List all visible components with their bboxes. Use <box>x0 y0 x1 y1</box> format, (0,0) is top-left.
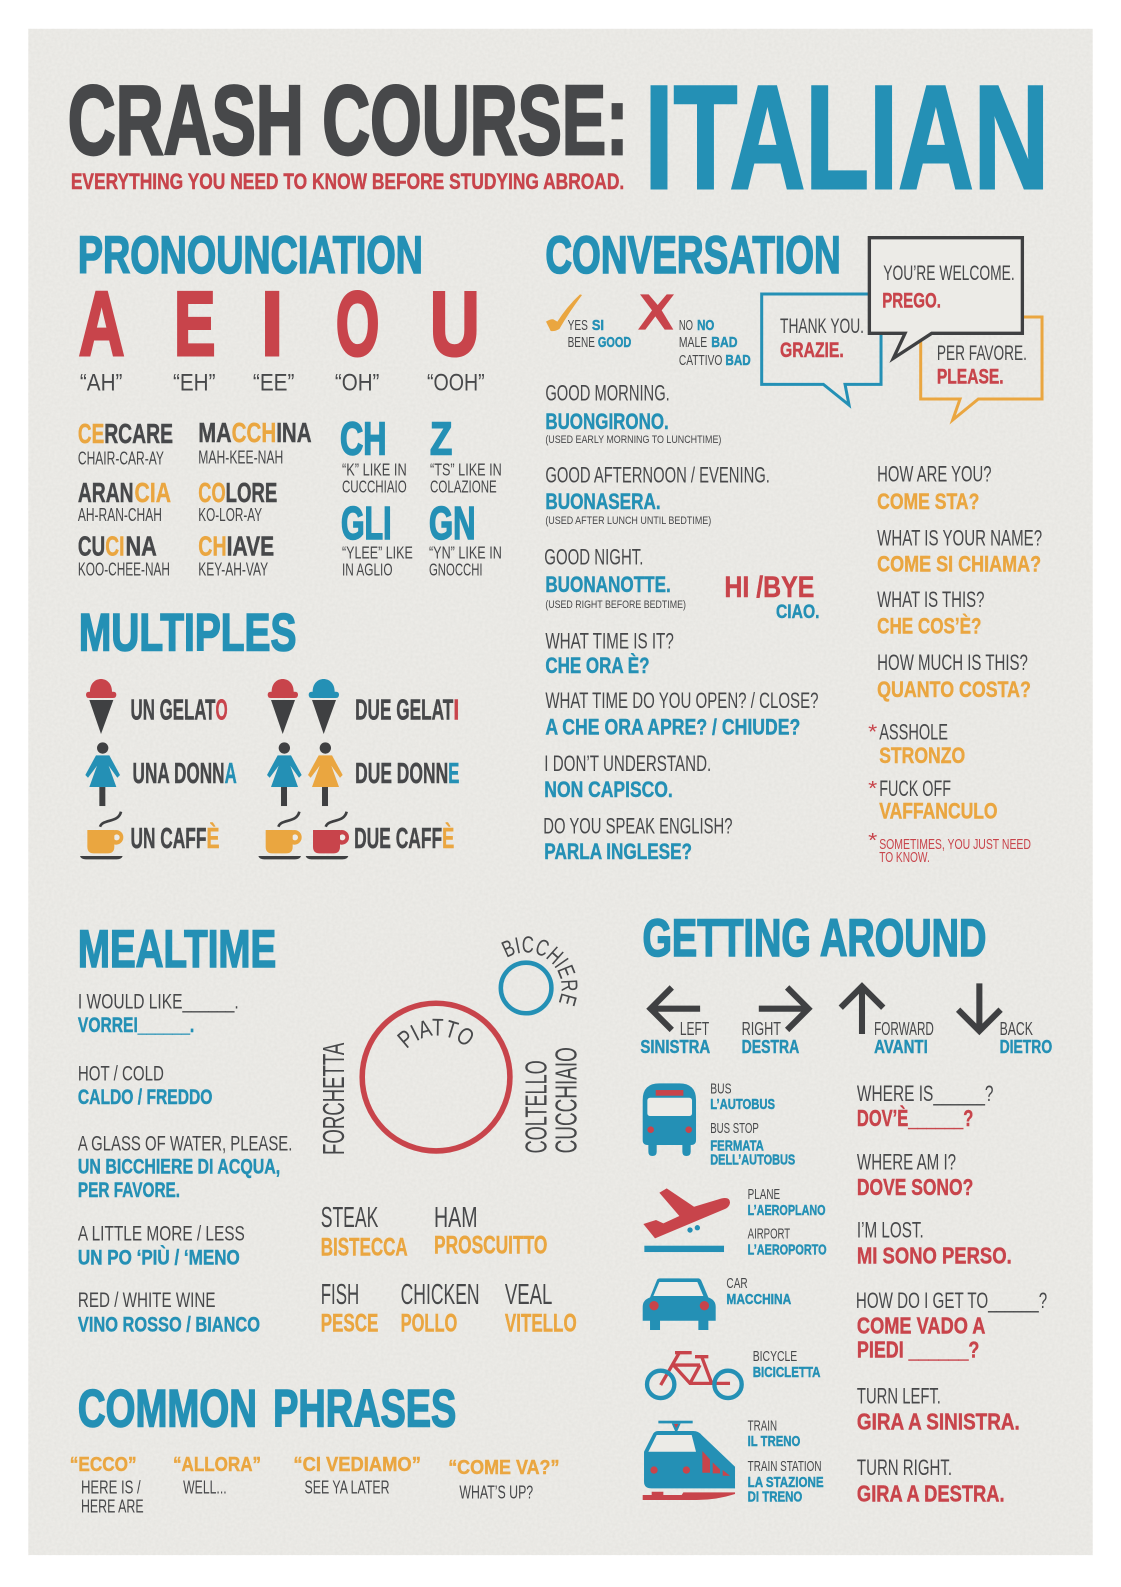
phrases right column: HOW ARE YOU? <box>877 462 991 487</box>
plate circle <box>362 1003 510 1151</box>
icons and speech bubbles <box>546 238 1042 420</box>
multiples labels: I <box>453 694 459 726</box>
multiples labels: DUE GELAT <box>355 694 453 726</box>
yes / no vocabulary: CATTIVO <box>679 353 722 369</box>
swear words footnotes: VAFFANCULO <box>879 798 998 823</box>
example words: KEY-AH-VAY <box>198 560 268 580</box>
multiples labels: DUE DONN <box>355 758 448 790</box>
yes / no vocabulary: NO <box>697 318 714 334</box>
multiples labels <box>131 694 459 855</box>
panel: common phrases <box>70 1380 559 1517</box>
mealtime phrases: I WOULD LIKE______. <box>78 990 239 1014</box>
example words: AH-RAN-CHAH <box>78 505 162 525</box>
transport labels: L’AEROPLANO <box>748 1202 826 1219</box>
glass circle <box>501 963 551 1013</box>
icon: woman blue second <box>267 742 302 806</box>
consonant clusters: GNOCCHI <box>429 560 483 580</box>
example words: CE <box>78 418 104 449</box>
consonant clusters: IN AGLIO <box>342 560 393 580</box>
getting around phrases: GIRA A SINISTRA. <box>857 1409 1020 1435</box>
example words: MA <box>198 417 232 448</box>
example words: CIA <box>135 477 171 508</box>
label: piatto: PIATTO <box>396 1018 473 1048</box>
food vocabulary: POLLO <box>401 1309 457 1337</box>
vowels: “AH” <box>80 370 122 397</box>
consonant clusters: CH <box>340 412 386 464</box>
multiples labels: A <box>225 758 237 790</box>
icon: cross <box>638 294 674 330</box>
panel: pronunciation <box>78 226 502 580</box>
direction labels: RIGHT <box>742 1019 781 1039</box>
mealtime phrases: RED / WHITE WINE <box>78 1288 216 1312</box>
panel: multiples <box>79 604 459 859</box>
example words: CO <box>198 477 226 508</box>
direction labels: DESTRA <box>742 1037 799 1057</box>
getting around phrases: COME VADO A <box>857 1312 986 1338</box>
example words: KO-LOR-AY <box>198 505 262 525</box>
transport labels: AIRPORT <box>748 1225 790 1242</box>
phrases right column: COME SI CHIAMA? <box>877 552 1041 577</box>
yes / no vocabulary: GOOD <box>598 335 631 351</box>
swear words footnotes: ASSHOLE <box>879 720 948 745</box>
getting around phrases: DOVE SONO? <box>857 1174 973 1200</box>
icon: car <box>643 1278 716 1330</box>
panel: mealtime <box>78 920 584 1337</box>
phrases left column: GOOD AFTERNOON / EVENING. <box>545 463 770 488</box>
getting around phrases: TURN LEFT. <box>857 1383 941 1408</box>
vowels: “OH” <box>335 370 379 397</box>
transport labels: TRAIN <box>748 1418 777 1435</box>
example words: LORE <box>226 477 277 508</box>
example words: ARAN <box>78 477 134 508</box>
direction labels: LEFT <box>680 1019 709 1039</box>
arrow: right <box>759 987 808 1030</box>
phrases right column: WHAT IS THIS? <box>877 587 984 612</box>
icon: woman blue <box>85 742 120 806</box>
phrases list: WELL... <box>183 1477 227 1497</box>
yes / no vocabulary <box>568 318 751 369</box>
phrases left column: NON CAPISCO. <box>544 777 673 802</box>
vowels <box>79 274 485 397</box>
speech bubble: orange <box>921 317 1042 420</box>
heading: common phrases: PHRASES <box>273 1380 456 1439</box>
phrases left column: (USED EARLY MORNING TO LUNCHTIME) <box>545 434 722 446</box>
phrases list: HERE IS / <box>81 1477 141 1497</box>
transport labels: BICICLETTA <box>753 1364 821 1381</box>
transport icons <box>643 1083 742 1500</box>
phrases right column <box>877 462 1042 702</box>
icon: coffee orange second <box>258 812 302 859</box>
consonant clusters: “TS” LIKE IN <box>430 460 502 480</box>
yes / no vocabulary: YES <box>568 318 588 334</box>
direction arrows <box>651 983 1001 1034</box>
phrases right column: HOW MUCH IS THIS? <box>877 650 1028 675</box>
title: CRASH COURSE: <box>68 65 628 175</box>
multiples labels: UN GELAT <box>131 694 215 726</box>
swear words footnotes: * <box>868 722 877 744</box>
transport labels: DELL’AUTOBUS <box>710 1152 795 1169</box>
multiples labels: DUE CAFF <box>354 823 442 855</box>
getting around phrases: WHERE AM I? <box>857 1150 956 1175</box>
arrow: down <box>958 983 1001 1031</box>
getting around phrases <box>856 1081 1047 1506</box>
place setting diagram <box>318 936 584 1155</box>
callout: hi / bye: HI /BYE <box>724 571 814 604</box>
bubble text: THANK YOU. <box>780 314 864 338</box>
phrases left column: BUONANOTTE. <box>545 572 671 597</box>
transport labels: TRAIN STATION <box>748 1458 822 1475</box>
mealtime phrases: A GLASS OF WATER, PLEASE. <box>78 1131 292 1155</box>
icon: coffee orange <box>80 812 123 859</box>
getting around phrases: DOV’È______? <box>857 1104 973 1131</box>
food vocabulary: VEAL <box>505 1279 552 1311</box>
phrases left column: BUONGIRONO. <box>545 409 669 434</box>
phrases list: HERE ARE <box>81 1497 144 1517</box>
phrases left column: (USED RIGHT BEFORE BEDTIME) <box>545 599 686 611</box>
phrases left column: A CHE ORA APRE? / CHIUDE? <box>545 715 800 740</box>
panel: getting around <box>640 909 1052 1506</box>
icon: gelato blue <box>309 679 339 734</box>
example words: CH <box>198 530 227 561</box>
phrases right column: COME STA? <box>877 489 979 514</box>
direction labels: AVANTI <box>874 1037 928 1057</box>
mealtime phrases: UN PO ‘PIÙ / ‘MENO <box>78 1245 240 1270</box>
icons: gelato, woman, coffee <box>80 679 349 859</box>
food vocabulary: FISH <box>321 1279 359 1311</box>
icon: coffee red <box>306 812 349 859</box>
bubble text: YOU’RE WELCOME. <box>883 261 1015 285</box>
mealtime phrases: A LITTLE MORE / LESS <box>78 1221 245 1245</box>
icon: bicycle <box>647 1353 742 1398</box>
speech bubble: dark <box>869 238 1022 358</box>
bubble text: PER FAVORE. <box>937 341 1027 365</box>
label: coltello: COLTELLO <box>521 1060 554 1153</box>
consonant clusters: CUCCHIAIO <box>342 477 407 497</box>
swear words footnotes: * <box>868 778 877 800</box>
phrases list: WHAT’S UP? <box>459 1482 533 1502</box>
phrases left column: GOOD MORNING. <box>545 381 670 406</box>
multiples labels: È <box>442 823 454 855</box>
example words: CU <box>78 530 105 561</box>
phrases left column: PARLA INGLESE? <box>544 839 692 864</box>
phrases list: “ALLORA” <box>173 1454 261 1476</box>
yes / no vocabulary: BENE <box>568 335 595 351</box>
yes / no vocabulary: MALE <box>679 335 707 351</box>
direction labels: DIETRO <box>1000 1037 1052 1057</box>
phrases left column: DO YOU SPEAK ENGLISH? <box>543 814 732 839</box>
food vocabulary: CHICKEN <box>401 1279 480 1311</box>
phrases left column <box>543 381 818 864</box>
food vocabulary: HAM <box>434 1202 478 1234</box>
arrow: left <box>651 987 700 1030</box>
vowels: U <box>430 274 480 375</box>
example words: KOO-CHEE-NAH <box>78 560 170 580</box>
phrases left column: BUONASERA. <box>545 489 661 514</box>
swear words footnotes: STRONZO <box>879 743 965 768</box>
getting around phrases: PIEDI ______? <box>857 1337 979 1363</box>
food vocabulary: VITELLO <box>505 1309 577 1337</box>
consonant clusters: Z <box>430 412 452 464</box>
panel: conversation <box>543 226 1042 866</box>
multiples labels: È <box>206 823 220 855</box>
transport labels: FERMATA <box>710 1137 764 1154</box>
speech bubble: blue <box>762 294 881 405</box>
example words <box>78 417 312 580</box>
food vocabulary: STEAK <box>321 1202 378 1234</box>
transport labels: IL TRENO <box>748 1433 800 1450</box>
getting around phrases: I’M LOST. <box>857 1217 924 1242</box>
vowels: “EH” <box>173 370 216 397</box>
direction labels: SINISTRA <box>640 1037 710 1057</box>
icon: bus <box>643 1083 696 1156</box>
transport labels: BUS STOP <box>710 1120 759 1137</box>
getting around phrases: MI SONO PERSO. <box>857 1243 1012 1269</box>
transport labels: MACCHINA <box>726 1291 791 1308</box>
transport labels: BUS <box>710 1081 731 1098</box>
phrases right column: CHE COS’È? <box>877 613 981 638</box>
swear words footnotes: TO KNOW. <box>879 849 930 866</box>
transport labels <box>710 1081 827 1505</box>
example words: IAVE <box>227 530 274 561</box>
icon: gelato red second <box>268 679 298 734</box>
getting around phrases: GIRA A DESTRA. <box>857 1480 1005 1506</box>
getting around phrases: WHERE IS______? <box>857 1081 994 1106</box>
heading: mealtime: MEALTIME <box>78 920 276 979</box>
mealtime phrases: VINO ROSSO / BIANCO <box>78 1312 260 1336</box>
transport labels: L’AEROPORTO <box>748 1242 827 1259</box>
mealtime phrases <box>78 990 292 1336</box>
multiples labels: E <box>448 758 459 790</box>
consonant clusters: COLAZIONE <box>430 477 497 497</box>
phrases left column: WHAT TIME DO YOU OPEN? / CLOSE? <box>545 688 818 713</box>
transport labels: CAR <box>726 1275 748 1292</box>
yes / no vocabulary: BAD <box>725 353 751 369</box>
getting around phrases: TURN RIGHT. <box>857 1455 952 1480</box>
mealtime phrases: CALDO / FREDDO <box>78 1085 212 1109</box>
heading: multiples: MULTIPLES <box>79 604 296 663</box>
example words: MAH-KEE-NAH <box>198 447 283 467</box>
mealtime phrases: HOT / COLD <box>78 1062 164 1086</box>
swear words footnotes: * <box>868 830 877 852</box>
phrases list: “ECCO” <box>70 1454 137 1476</box>
example words: RCARE <box>104 418 173 449</box>
heading: pronunciation: PRONOUNCIATION <box>78 226 423 285</box>
transport labels: L’AUTOBUS <box>710 1096 775 1113</box>
label: cucchiaio: CUCCHIAIO <box>551 1047 584 1153</box>
bubble text <box>780 261 1027 388</box>
consonant clusters: “YN” LIKE IN <box>429 542 502 562</box>
phrases left column: I DON’T UNDERSTAND. <box>544 751 711 776</box>
consonant clusters: “YLEE” LIKE <box>342 542 413 562</box>
consonant clusters: GLI <box>341 497 392 549</box>
phrases right column: WHAT IS YOUR NAME? <box>877 525 1042 550</box>
vowels: “OOH” <box>427 370 485 397</box>
label: bicchiere: BICCHIERE <box>501 936 578 1006</box>
icon: check mark <box>546 294 582 331</box>
example words: NA <box>125 530 157 561</box>
phrases left column: WHAT TIME IS IT? <box>545 629 674 654</box>
phrases right column: QUANTO COSTA? <box>877 677 1031 702</box>
title <box>68 55 1049 220</box>
swear words footnotes: FUCK OFF <box>879 776 951 801</box>
yes / no vocabulary: BAD <box>711 335 738 351</box>
icon: plane <box>643 1188 730 1252</box>
consonant clusters <box>340 412 502 580</box>
phrases list: “COME VA?” <box>448 1457 559 1479</box>
mealtime phrases: UN BICCHIERE DI ACQUA, <box>78 1155 280 1179</box>
yes / no vocabulary: NO <box>679 318 693 334</box>
consonant clusters: GN <box>429 497 476 549</box>
vowels: I <box>261 274 283 375</box>
phrases list: “CI VEDIAMO” <box>293 1454 421 1476</box>
vowels: “EE” <box>253 370 294 397</box>
example words: CCH <box>232 417 276 448</box>
swear words footnotes <box>868 720 1031 866</box>
yes / no vocabulary: SI <box>592 318 604 334</box>
transport labels: BICYCLE <box>753 1348 797 1365</box>
phrases left column: (USED AFTER LUNCH UNTIL BEDTIME) <box>545 515 711 527</box>
example words: CI <box>105 530 124 561</box>
example words: INA <box>276 417 312 448</box>
bubble text: GRAZIE. <box>780 338 844 362</box>
callout: hi / bye <box>724 571 820 623</box>
food vocabulary: PESCE <box>321 1309 378 1337</box>
vowels: O <box>336 274 379 375</box>
transport labels: DI TRENO <box>748 1488 802 1505</box>
mealtime phrases: PER FAVORE. <box>78 1178 180 1202</box>
food vocabulary <box>321 1202 577 1337</box>
mealtime phrases: VORREI______. <box>78 1013 194 1037</box>
example words: CHAIR-CAR-AY <box>78 448 164 468</box>
food vocabulary: PROSCUITTO <box>434 1232 547 1260</box>
phrases list: SEE YA LATER <box>305 1477 390 1497</box>
heading: conversation: CONVERSATION <box>545 226 841 285</box>
phrases left column: CHE ORA È? <box>545 653 650 678</box>
phrases left column: GOOD NIGHT. <box>544 545 643 570</box>
multiples labels: UNA DONN <box>133 758 225 790</box>
vowels: A <box>79 274 124 375</box>
transport labels: PLANE <box>748 1186 780 1203</box>
callout: hi / bye: CIAO. <box>776 602 820 623</box>
food vocabulary: BISTECCA <box>321 1234 408 1262</box>
transport labels: LA STAZIONE <box>748 1474 824 1491</box>
phrases list <box>70 1454 559 1517</box>
multiples labels: O <box>215 694 228 726</box>
direction labels: FORWARD <box>874 1019 934 1039</box>
consonant clusters: “K” LIKE IN <box>342 460 407 480</box>
icon: woman orange <box>308 742 343 806</box>
bubble text: PREGO. <box>882 289 941 313</box>
icon: gelato red <box>86 679 116 734</box>
swear words footnotes: SOMETIMES, YOU JUST NEED <box>879 836 1031 853</box>
bubble text: PLEASE. <box>937 364 1004 388</box>
heading: getting around: GETTING AROUND <box>642 909 986 968</box>
icon: train <box>643 1421 735 1500</box>
title: EVERYTHING YOU NEED TO KNOW BEFORE STUDYING ABROAD. <box>71 169 624 194</box>
label: forchetta: FORCHETTA <box>318 1042 351 1155</box>
vowels: E <box>174 274 215 375</box>
direction labels <box>640 1019 1052 1057</box>
multiples labels: UN CAFF <box>131 823 206 855</box>
heading: common phrases: COMMON <box>78 1380 257 1439</box>
direction labels: BACK <box>1000 1019 1033 1039</box>
heading: common phrases <box>78 1380 456 1439</box>
arrow: up <box>841 986 883 1034</box>
